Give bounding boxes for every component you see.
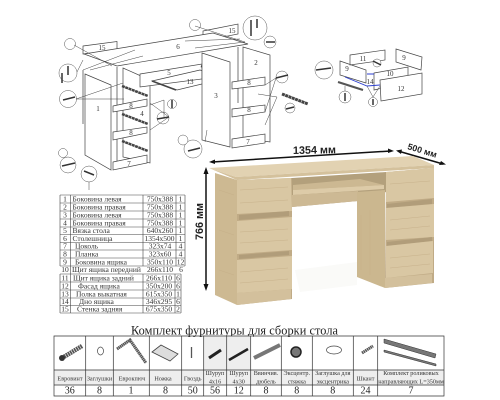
- table rows: 4: [179, 242, 183, 250]
- hardware labels: стяжка: [288, 378, 306, 386]
- hardware quantities: 1: [128, 386, 134, 396]
- drawer base 14 blue lines: 14: [366, 78, 374, 86]
- table rows: 11: [61, 274, 69, 282]
- table rows: 750x388: [147, 218, 173, 228]
- table rows: Боковина ящика: [75, 258, 128, 266]
- part 6 tabletop: [83, 33, 248, 169]
- table rows: 1: [179, 234, 183, 243]
- table rows: Дно ящика: [79, 297, 115, 306]
- table rows: 750x388: [147, 202, 173, 212]
- part 2 panel and fronts: [232, 47, 270, 148]
- hardware quantities: 8: [97, 386, 102, 396]
- hardware quantities: 8: [330, 386, 335, 396]
- part 15 back panels: [83, 24, 238, 54]
- drawer panels 9, 10, 11: 9: [345, 65, 349, 73]
- icon: eccentric coupler: [291, 347, 301, 357]
- table rows: Вязка стола: [72, 226, 111, 235]
- hardware labels: Ножка: [154, 376, 172, 382]
- hardware label band: [54, 336, 444, 385]
- hardware labels: Заглушка для: [315, 370, 351, 377]
- table rows: Боковина правая: [72, 218, 126, 228]
- table rows: 12: [61, 282, 69, 290]
- icon: screw 4x16: [209, 350, 221, 358]
- icon: dowel pin: [362, 346, 373, 353]
- hardware quantities: 8: [294, 386, 299, 396]
- exploded diagram: desk assembly: [58, 16, 308, 190]
- icon: roller guides: [384, 339, 436, 366]
- table rows: 266x110: [146, 274, 172, 282]
- hardware labels: Комплект роликовых: [383, 370, 440, 377]
- table rows: 5: [63, 226, 67, 235]
- table rows: 3: [63, 210, 67, 220]
- hardware quantities: 24: [360, 386, 370, 396]
- table rows: 1: [179, 218, 183, 228]
- table rows: 640x260: [147, 226, 173, 235]
- hardware title: Комплект фурнитуры для сборки стола: [131, 324, 339, 338]
- part 4 panel: 8: [129, 102, 133, 110]
- part 4 panel: 7: [127, 160, 131, 168]
- table rows: 323x74: [149, 242, 172, 250]
- table rows: Боковина левая: [72, 210, 122, 220]
- table rows: 346x295: [146, 297, 172, 306]
- part 2 panel and fronts: 8: [247, 79, 251, 87]
- drawer panels 9, 10, 11: [340, 49, 422, 90]
- table rows: Полка выкатная: [76, 290, 127, 298]
- parts list table: [60, 194, 185, 314]
- table rows: Боковина правая: [72, 202, 126, 212]
- desk center panel: [357, 190, 385, 288]
- hardware quantities: 50: [188, 386, 198, 396]
- table rows: Цоколь: [75, 242, 99, 250]
- left pedestal side: [215, 173, 237, 305]
- table rows: 1: [179, 194, 183, 204]
- hardware labels: направляющих L=350мм: [378, 378, 444, 386]
- hardware labels: дюбель: [256, 378, 276, 386]
- left pedestal fronts: [237, 178, 292, 305]
- part 5 and 13 pull-out shelf: 13: [186, 78, 194, 86]
- table rows: 10: [61, 265, 69, 274]
- hardware quantities: 7: [408, 386, 414, 396]
- table rows: 350x200: [146, 282, 172, 290]
- dimension: depth 500 mm: [396, 141, 446, 165]
- drawer slide: [338, 82, 363, 90]
- hardware labels: 4x30: [233, 378, 245, 386]
- table rows: 266x110: [147, 265, 173, 274]
- part 1 left side panel: [85, 74, 111, 170]
- part 2 panel and fronts: 2: [254, 59, 258, 67]
- table rows: 323x60: [149, 250, 172, 258]
- part 6 tabletop: 6: [176, 43, 180, 51]
- table rows: 6: [176, 274, 180, 282]
- table rows: Стенка задняя: [77, 304, 123, 314]
- drawer callouts: [315, 59, 381, 106]
- table rows: 1: [176, 290, 180, 298]
- table rows: 675x350: [146, 304, 172, 314]
- table rows: 6: [179, 265, 183, 274]
- table rows: 2: [176, 304, 180, 314]
- dimension: width 1354 mm: 1354 мм: [293, 144, 336, 157]
- hardware quantities: 36: [65, 386, 75, 396]
- table rows: 2: [63, 202, 67, 212]
- table rows: 1: [179, 210, 183, 220]
- table rows: 13: [61, 290, 69, 298]
- table rows: [61, 194, 184, 314]
- hardware labels: эксцентрика: [317, 378, 349, 386]
- hardware labels: Ввинчив.: [254, 370, 279, 377]
- hardware labels: Еврокпюч: [119, 376, 145, 382]
- table rows: 14: [61, 297, 69, 306]
- right pedestal fronts: [385, 168, 434, 288]
- hardware quantities: 8: [163, 386, 168, 396]
- hardware labels: Шуруп: [206, 370, 225, 377]
- part 15 back panels: 15: [228, 27, 236, 35]
- hardware labels: 4x16: [209, 378, 221, 386]
- part 2 panel and fronts: 8: [247, 106, 251, 114]
- callout circles with screws: [58, 16, 295, 190]
- icon: screw 4x30: [229, 349, 248, 360]
- table grid: [60, 195, 185, 313]
- table rows: 4: [63, 218, 67, 228]
- icon: nail: [190, 347, 192, 358]
- part 5 and 13 pull-out shelf: 5: [167, 69, 171, 77]
- part 4 panel: [113, 68, 150, 170]
- part 15 back panels: 15: [98, 44, 106, 52]
- table rows: 1354x500: [144, 234, 175, 243]
- table rows: Фасад ящика: [78, 282, 120, 290]
- table rows: 15: [61, 304, 69, 314]
- table rows: 8: [63, 250, 67, 258]
- hardware labels: Шуруп: [229, 370, 249, 377]
- hardware labels: [57, 370, 444, 386]
- table rows: 750x388: [147, 210, 173, 220]
- icon: foot: [152, 345, 178, 361]
- drawer panels 9, 10, 11: 11: [360, 55, 367, 63]
- drawer panels 9, 10, 11: 10: [386, 70, 394, 78]
- table rows: Боковина левая: [72, 194, 122, 204]
- hardware table: [54, 336, 444, 396]
- desk wood grain: [219, 181, 430, 283]
- desk product illustration: [209, 156, 434, 305]
- table rows: Щит ящика передний: [72, 265, 141, 274]
- table rows: 615x350: [146, 290, 172, 298]
- hardware quantities: 56: [210, 386, 220, 396]
- table rows: 6: [176, 297, 180, 306]
- table rows: 350x110: [147, 258, 173, 266]
- hardware labels: Заглушки: [87, 376, 113, 382]
- hardware quantities: 8: [264, 386, 268, 396]
- table rows: 1: [63, 194, 67, 204]
- table rows: 750x388: [147, 194, 173, 204]
- rail on the right: [282, 94, 308, 104]
- table rows: 4: [179, 250, 183, 258]
- table rows: 7: [63, 242, 67, 250]
- part 4 panel: 8: [129, 129, 133, 137]
- table rows: 1: [179, 202, 183, 212]
- table rows: Щит ящика задний: [73, 274, 134, 282]
- desk back and keyboard shelf: [292, 172, 386, 207]
- hardware quantities: 12: [234, 386, 244, 396]
- hardware labels: Евровинт: [57, 376, 83, 382]
- dimension: depth 500 mm: 500 мм: [406, 141, 438, 160]
- icon: dowel: [254, 345, 280, 358]
- part 3 panel: [202, 53, 230, 147]
- icon: eccentric cap: [326, 346, 342, 354]
- table rows: 1: [179, 226, 183, 235]
- part 3 panel: 3: [214, 92, 218, 100]
- hardware grid: [54, 336, 444, 396]
- table rows: 6: [63, 234, 67, 243]
- hardware labels: Гвоздь: [184, 376, 202, 382]
- dimension: height 766 mm: 766 мм: [194, 203, 206, 240]
- icon: euro screw: [59, 346, 82, 361]
- part 5 and 13 pull-out shelf: [140, 64, 228, 90]
- part 2 panel and fronts: 7: [246, 138, 250, 146]
- icon: cap: [98, 347, 104, 355]
- drawer front 12: 12: [398, 85, 405, 93]
- desk shadow: [295, 262, 357, 292]
- table rows: 12: [177, 258, 184, 266]
- hardware quantities: [65, 386, 414, 396]
- table rows: Столешница: [72, 234, 113, 243]
- table rows: Планка: [75, 250, 99, 258]
- part 1 left side panel: 1: [96, 105, 100, 113]
- drawer panels 9, 10, 11: 9: [402, 54, 406, 62]
- icon: euro key: [117, 340, 146, 363]
- dimension: width 1354 mm: [209, 144, 394, 164]
- hardware labels: Шкант: [357, 376, 375, 382]
- desk tabletop: [209, 156, 434, 177]
- hardware icons: [59, 339, 436, 366]
- table rows: 6: [176, 282, 180, 290]
- dimension: height 766 mm: [194, 167, 208, 291]
- hardware labels: Эксцентр.: [284, 370, 310, 377]
- exploded diagram: drawer: [315, 49, 422, 106]
- table rows: 9: [63, 258, 67, 266]
- part 4 panel: 4: [140, 110, 144, 118]
